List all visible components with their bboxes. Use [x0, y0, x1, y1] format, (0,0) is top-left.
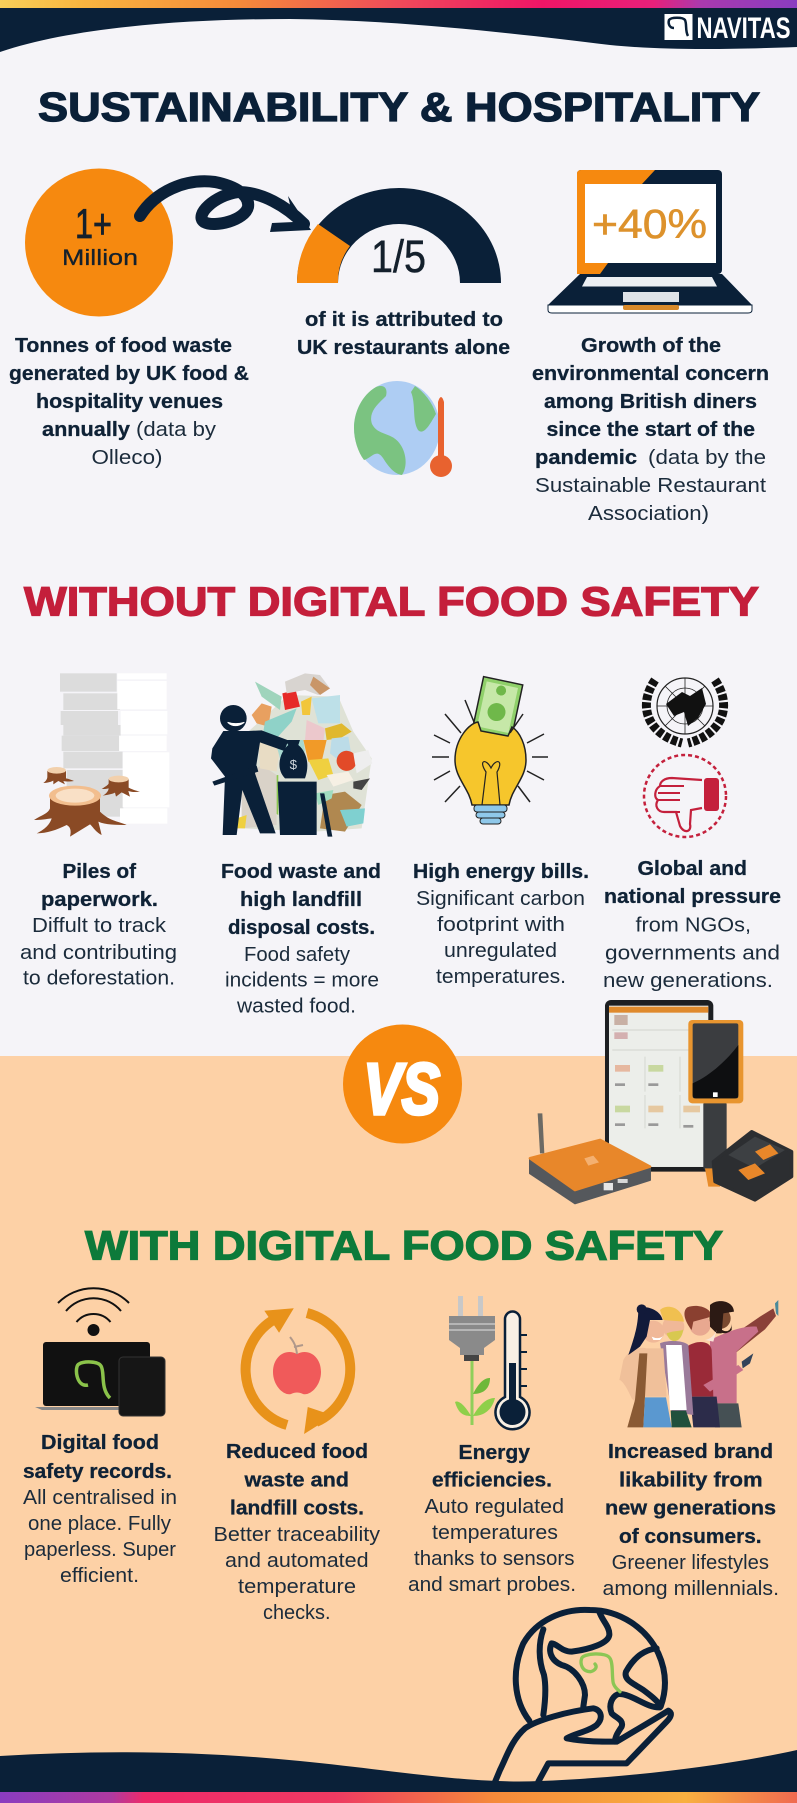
heading: without digital food safety: WITHOUT DIGITAL FOOD SAFETY	[24, 578, 759, 624]
text: increased brand likability: Increased brand	[608, 1440, 773, 1463]
text: tonnes of food waste: hospitality venues	[36, 390, 223, 413]
icon: laptop +40%	[548, 170, 752, 313]
text: tonnes of food waste: generated by UK food &	[9, 362, 249, 385]
text: energy efficiencies: efficiencies.	[432, 1468, 552, 1492]
heading: with digital food safety: WITH DIGITAL FOOD SAFETY	[85, 1222, 723, 1268]
text: growth of concern: Association)	[588, 502, 709, 525]
text: global and national pressure	[603, 857, 781, 992]
icon: lightbulb with banknote	[432, 677, 548, 824]
text: growth of concern	[532, 334, 769, 525]
text: piles of paperwork	[20, 860, 177, 990]
text: food waste and landfill	[221, 860, 381, 1018]
badge: VS: VS	[364, 1050, 440, 1130]
router	[530, 1113, 650, 1203]
text: food waste and landfill: disposal costs.	[228, 916, 375, 939]
stat: 1+ million circle: 1+	[75, 200, 112, 247]
icon: apple with recycling arrows	[246, 1310, 350, 1431]
text: energy efficiencies: Energy	[458, 1441, 531, 1464]
peach lower panel	[0, 1056, 797, 1803]
text: high energy bills: unregulated	[444, 939, 557, 962]
text: growth of concern: Sustainable Restaurant	[535, 474, 766, 497]
text: food waste and landfill: Food waste and	[221, 860, 381, 883]
text: food waste and landfill: high landfill	[240, 888, 362, 911]
text: piles of paperwork: Diffult to track	[32, 914, 167, 937]
icon: hand holding the globe	[492, 1610, 671, 1790]
text: piles of paperwork: and contributing	[20, 941, 177, 964]
text: increased brand likability: new generations	[605, 1496, 776, 1520]
text: food waste and landfill: Food safety	[244, 943, 351, 966]
text: increased brand likability	[602, 1440, 779, 1600]
text: global and national pressure: from NGOs,	[636, 914, 751, 936]
text: growth of concern: environmental concern	[532, 362, 769, 385]
text: growth of concern: (data by the	[648, 446, 766, 469]
text: energy efficiencies: Auto regulated	[424, 1495, 564, 1518]
text: global and national pressure: national pressure	[604, 885, 781, 908]
icon: plug with plant and thermometer	[449, 1296, 530, 1429]
tablet	[605, 1000, 713, 1172]
text: reduced food waste: Better traceability	[214, 1523, 381, 1546]
text: attributed to UK restaurants: UK restaurants alone	[297, 336, 510, 359]
icon: UN emblem	[646, 678, 724, 743]
text: high energy bills: footprint with	[437, 913, 565, 936]
text: reduced food waste: Reduced food	[226, 1440, 368, 1463]
text: reduced food waste: checks.	[263, 1601, 330, 1624]
text: growth of concern: Growth of the	[581, 334, 721, 357]
stat: 1+ million circle	[25, 168, 173, 316]
text: digital food safety records: paperless. Super	[24, 1538, 176, 1561]
text: growth of concern: since the start of the	[546, 418, 755, 441]
stat: 1+ million circle: Million	[62, 245, 138, 270]
text: growth of concern: among British diners	[544, 390, 757, 413]
text: food waste and landfill: incidents = more	[225, 968, 379, 992]
text: attributed to UK restaurants	[297, 308, 510, 359]
handheld probe reader	[688, 1020, 743, 1187]
text: piles of paperwork: to deforestation.	[23, 966, 175, 990]
text: digital food safety records: efficient.	[60, 1564, 139, 1587]
title: SUSTAINABILITY & HOSPITALITY	[38, 84, 760, 130]
gauge: one fifth: 1/5	[371, 231, 426, 282]
icon: laptop +40%: +40%	[592, 201, 707, 247]
icon: group of young people selfie	[619, 1300, 778, 1427]
icon: paper stack and stumps	[34, 673, 169, 837]
product devices	[530, 1000, 792, 1203]
text: piles of paperwork: Piles of	[62, 860, 136, 883]
icon: connected devices with wifi	[35, 1288, 165, 1416]
text: high energy bills: Significant carbon	[416, 887, 585, 910]
text: attributed to UK restaurants: of it is attributed to	[305, 308, 503, 331]
text: global and national pressure: governments and	[605, 942, 780, 964]
text: piles of paperwork: paperwork.	[41, 888, 158, 911]
icon: earth with thermometer	[354, 381, 452, 477]
text: tonnes of food waste: Tonnes of food waste	[15, 334, 232, 357]
text: tonnes of food waste	[9, 334, 249, 469]
badge: VS	[343, 1024, 462, 1144]
arrow: from circle to gauge	[140, 181, 311, 232]
text: high energy bills: High energy bills.	[413, 860, 589, 883]
text: high energy bills	[413, 860, 589, 988]
text: growth of concern: pandemic	[535, 446, 637, 469]
text: tonnes of food waste: annually	[42, 418, 131, 441]
text: energy efficiencies: temperatures	[432, 1521, 558, 1544]
text: energy efficiencies: and smart probes.	[408, 1573, 576, 1596]
text: reduced food waste	[214, 1440, 381, 1624]
top wave banner	[0, 0, 797, 52]
text: global and national pressure: new generations.	[603, 969, 773, 992]
text: increased brand likability: Greener lifestyles	[612, 1551, 769, 1574]
text: energy efficiencies	[408, 1441, 576, 1596]
text: global and national pressure: Global and	[638, 857, 747, 880]
text: tonnes of food waste: (data by	[136, 418, 217, 441]
text: reduced food waste: landfill costs.	[230, 1496, 364, 1520]
icon: person with waste pile: $	[290, 757, 298, 772]
bottom wave footer	[0, 1750, 797, 1803]
icon: thumbs down in dashed circle	[644, 755, 726, 837]
icon: person with waste pile	[211, 673, 372, 837]
text: reduced food waste: waste and	[243, 1468, 349, 1492]
sensors	[713, 1132, 792, 1200]
text: digital food safety records	[23, 1431, 177, 1587]
text: increased brand likability: of consumers.	[619, 1525, 762, 1548]
text: digital food safety records: safety records.	[23, 1460, 172, 1483]
text: digital food safety records: Digital food	[41, 1431, 159, 1454]
text: reduced food waste: temperature	[238, 1575, 356, 1598]
text: high energy bills: temperatures.	[436, 965, 566, 988]
text: increased brand likability: among millennials.	[602, 1577, 779, 1600]
text: food waste and landfill: wasted food.	[236, 994, 356, 1018]
text: digital food safety records: one place. Fully	[28, 1512, 172, 1535]
text: tonnes of food waste: Olleco)	[92, 446, 162, 469]
gauge: one fifth	[297, 188, 501, 283]
text: digital food safety records: All centralised in	[23, 1486, 177, 1509]
text: energy efficiencies: thanks to sensors	[414, 1547, 574, 1570]
text: reduced food waste: and automated	[225, 1549, 369, 1572]
text: increased brand likability: likability from	[619, 1468, 763, 1492]
